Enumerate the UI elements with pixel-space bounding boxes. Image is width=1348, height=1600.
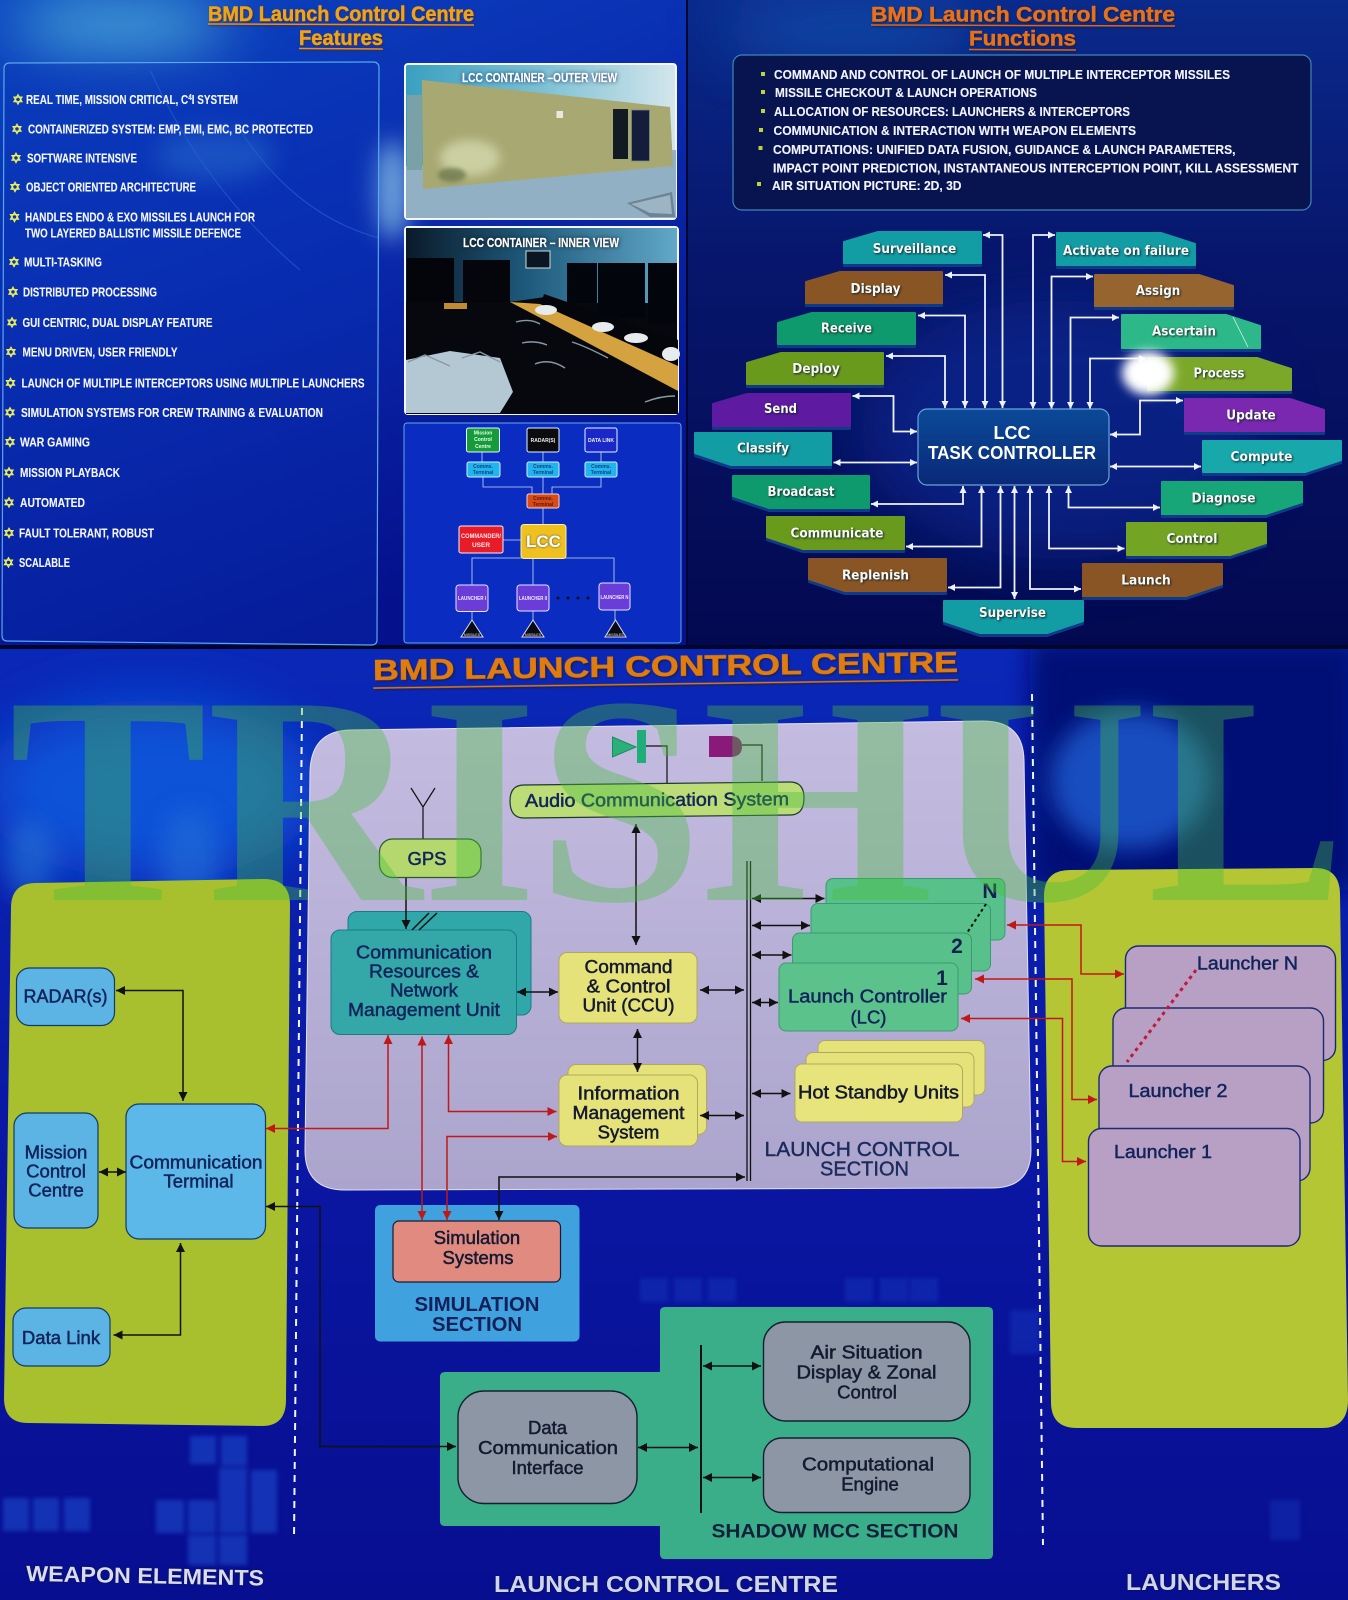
features list box: REAL TIME, MISSION CRITICAL, C (26, 93, 231, 107)
data communication interface (458, 1391, 637, 1504)
tag: classify (695, 433, 831, 465)
launcher stack: Launcher N (1197, 952, 1298, 974)
features list box: WAR GAMING (20, 436, 90, 450)
panel: control centre diagram (4, 636, 1348, 1597)
functions list box: COMMUNICATION & INTERACTION WITH WEAPON ELEMENTS (774, 124, 1136, 138)
launcher stack: Launcher 2 (1128, 1080, 1228, 1101)
box: data link: DATA LINK (588, 438, 614, 444)
tag: receive (778, 313, 915, 344)
shadow MCC section: SHADOW MCC SECTION (712, 1522, 958, 1542)
tag: process: Process (1194, 366, 1245, 382)
launch controller stack: Launch Controller (788, 986, 947, 1006)
launcher boxes: LAUNCHER N (600, 595, 629, 601)
features list box: ✡ (3, 526, 15, 542)
audio communication system (510, 782, 804, 818)
features list box: ✡ (5, 345, 17, 361)
launcher boxes: LAUNCHER I (458, 596, 487, 602)
features list box: ✡ (7, 285, 19, 301)
comms terminals: Comms. (533, 464, 553, 470)
label: launch control section (764, 1139, 960, 1180)
communication resources unit: Network (390, 980, 459, 1000)
features list box: GUI CENTRIC, DUAL DISPLAY FEATURE (22, 316, 212, 330)
missile triangles (461, 620, 626, 637)
command and control unit: Command (584, 956, 672, 977)
data communication interface: Data (528, 1417, 568, 1438)
communication resources unit: Communication (356, 942, 492, 962)
computational engine: Engine (841, 1474, 899, 1494)
features list box: OBJECT ORIENTED ARCHITECTURE (26, 180, 196, 194)
launcher boxes: LAUNCHER II (519, 596, 548, 602)
background: functions board (0, 0, 1348, 649)
tag: ascertain (1122, 315, 1260, 348)
launch controller stack: 1 (936, 967, 948, 990)
communication resources unit: Management Unit (348, 999, 500, 1020)
simulation section: SIMULATION (414, 1294, 540, 1316)
features heading: Features (299, 27, 383, 50)
features list box: ✡ (8, 255, 20, 271)
features list box: 4 (188, 93, 192, 102)
main heading: BMD LAUNCH CONTROL CENTRE (373, 647, 958, 687)
tag: receive: Receive (821, 322, 872, 336)
tag: compute (1203, 441, 1341, 472)
features heading (208, 3, 474, 50)
tag: send: Send (764, 402, 797, 417)
icon: microphone (709, 736, 762, 781)
launch controller stack: 2 (951, 935, 963, 958)
tag: replenish (809, 559, 946, 591)
launcher stack (1088, 946, 1336, 1246)
simulation systems box (393, 1221, 560, 1282)
box: mission control centre (466, 428, 500, 452)
mission control centre box: Control (26, 1160, 86, 1182)
functions list box: IMPACT POINT PREDICTION, INSTANTANEOUS INTERCEPTION POINT, KILL ASSESSMENT (773, 162, 1299, 176)
tag: diagnose: Diagnose (1192, 492, 1256, 506)
simulation section (375, 1205, 580, 1342)
functions list box: COMMAND AND CONTROL OF LAUNCH OF MULTIPLE INTERCEPTOR MISSILES (774, 68, 1230, 82)
simulation systems box: Systems (443, 1247, 513, 1268)
missile triangles: MISSILES (525, 633, 542, 637)
data communication interface: Interface (512, 1457, 584, 1478)
tag: assign (1095, 275, 1233, 306)
tag: update: Update (1226, 408, 1276, 424)
communication terminal box (126, 1104, 266, 1239)
radar box (16, 968, 114, 1026)
command and control unit: Unit (CCU) (582, 994, 674, 1016)
tag: supervise (944, 601, 1083, 633)
panel: weapon elements (4, 879, 290, 1426)
box: commander user: COMMANDER/ (461, 533, 501, 540)
functions heading (871, 4, 1175, 50)
tag: activate on failure (1057, 233, 1195, 265)
tag: assign: Assign (1136, 284, 1180, 299)
mission control centre box (14, 1113, 98, 1228)
features heading: BMD Launch Control Centre (208, 3, 474, 26)
photo: container inner view (405, 227, 680, 414)
radar box: RADAR(s) (24, 986, 108, 1006)
caption: outer view: LCC CONTAINER –OUTER VIEW (462, 70, 618, 85)
tag: update (1185, 399, 1324, 431)
tag: broadcast: Broadcast (768, 485, 834, 500)
box: radar (527, 428, 559, 452)
features list box: HANDLES ENDO & EXO MISSILES LAUNCH FOR (25, 210, 255, 224)
launch controller stack (779, 878, 1005, 1031)
computational engine (764, 1438, 970, 1512)
GPS: GPS (407, 848, 447, 869)
box: LCC: LCC (526, 532, 561, 551)
LCC task controller: TASK CONTROLLER (928, 443, 1096, 463)
functions list box: COMPUTATIONS: UNIFIED DATA FUSION, GUIDANCE & LAUNCH PARAMETERS, (773, 143, 1236, 157)
section labels: WEAPON ELEMENTS (26, 1561, 264, 1591)
tag: supervise: Supervise (979, 606, 1046, 621)
hot standby units (795, 1040, 985, 1122)
box: LCC (521, 524, 566, 558)
tag: control: Control (1166, 532, 1218, 547)
air situation display: Air Situation (810, 1342, 922, 1362)
features list box: LAUNCH OF MULTIPLE INTERCEPTORS USING MULTIPLE LAUNCHERS (22, 376, 364, 390)
tag: send (713, 394, 850, 426)
box: commander user: USER (472, 542, 490, 549)
mission control centre box: Mission (25, 1142, 87, 1162)
tag: launch (1083, 564, 1222, 596)
simulation systems box: Simulation (434, 1227, 520, 1248)
features list box: AUTOMATED (20, 496, 85, 510)
tag: surveillance (844, 232, 981, 263)
label: launch control section: SECTION (820, 1158, 909, 1180)
tag: activate on failure: Activate on failure (1063, 244, 1189, 259)
features list box: MULTI-TASKING (24, 256, 102, 270)
features list box: TWO LAYERED BALLISTIC MISSILE DEFENCE (25, 226, 241, 240)
hot standby units: Hot Standby Units (798, 1082, 959, 1102)
tag: control (1127, 523, 1266, 555)
comms terminals: Terminal (473, 470, 494, 476)
background: features board (0, 0, 687, 648)
command and control unit (559, 952, 697, 1023)
tag: launch: Launch (1121, 574, 1171, 588)
comms terminals: Comms. (473, 464, 493, 470)
tag: communicate: Communicate (790, 526, 884, 542)
connector arrows to task controller (834, 235, 1201, 599)
LCC task controller: LCC (994, 423, 1030, 443)
data communication interface: Communication (478, 1437, 618, 1458)
functions heading: Functions (969, 28, 1076, 50)
tag: ascertain: Ascertain (1152, 324, 1216, 340)
information management system: Management (572, 1102, 684, 1123)
tag: surveillance: Surveillance (873, 242, 956, 257)
black connectors (99, 824, 824, 1478)
air situation display (764, 1322, 970, 1421)
features list box: ✡ (5, 376, 16, 392)
comms terminals: Terminal (533, 470, 554, 476)
features list box: ✡ (6, 316, 18, 332)
features list box: ✡ (4, 406, 16, 422)
LCC task controller (918, 409, 1109, 485)
communication terminal box: Terminal (164, 1170, 233, 1192)
box: central comms terminal: Terminal (533, 502, 554, 508)
section dividers (294, 694, 1043, 1545)
information management system: System (598, 1122, 659, 1142)
tag: display: Display (850, 282, 901, 297)
computational engine: Computational (802, 1454, 934, 1474)
features list box: I SYSTEM (192, 93, 238, 107)
information management system: Information (578, 1082, 680, 1104)
box: mission control centre: Centre (475, 444, 491, 450)
tag: classify: Classify (737, 442, 789, 456)
features list box: ✡ (10, 151, 22, 167)
features list box (2, 62, 379, 645)
communication resources unit: Resources & (369, 960, 480, 982)
section labels (26, 1561, 1281, 1597)
audio communication system: Audio Communication System (525, 788, 789, 811)
missile triangles: MISSILES (464, 633, 481, 637)
missile triangles: MISSILES (607, 633, 624, 637)
icon: antenna (411, 788, 435, 839)
features list box: DISTRIBUTED PROCESSING (23, 286, 157, 300)
box: central comms terminal: Comms. (533, 496, 553, 502)
simulation section: SECTION (432, 1314, 522, 1336)
command and control unit: & Control (586, 976, 670, 996)
features list box: ✡ (3, 466, 15, 482)
features list box: ✡ (12, 92, 24, 108)
tag: deploy: Deploy (792, 362, 840, 377)
comms terminals: Comms. (591, 464, 611, 470)
section labels: LAUNCH CONTROL CENTRE (494, 1571, 838, 1597)
functions list box (733, 55, 1311, 210)
watermark: TRISHUL: TRISHUL (9, 636, 1346, 965)
box: central comms terminal (527, 494, 559, 508)
box: commander user (459, 526, 503, 553)
caption: inner view: LCC CONTAINER – INNER VIEW (463, 235, 620, 250)
launcher stack: Launcher 1 (1114, 1141, 1212, 1162)
features list box: ✡ (9, 210, 20, 226)
system bus (747, 861, 750, 1181)
features list box: ✡ (3, 556, 14, 572)
launcher boxes (456, 583, 630, 612)
tag: process (1148, 358, 1291, 390)
functions heading: BMD Launch Control Centre (871, 4, 1175, 26)
communication terminal box: Communication (130, 1152, 262, 1172)
functions list box: MISSILE CHECKOUT & LAUNCH OPERATIONS (775, 86, 1037, 100)
launch controller stack: (LC) (851, 1006, 886, 1028)
communication resources unit (331, 912, 531, 1034)
red connectors (266, 925, 1124, 1220)
shadow MCC section (440, 1307, 993, 1559)
box: mission control centre: Mission (474, 430, 492, 436)
features list box: ✡ (3, 496, 15, 512)
tag: compute: Compute (1230, 450, 1293, 465)
tag: broadcast (733, 476, 869, 508)
tag: diagnose (1162, 482, 1302, 514)
glare (1122, 351, 1174, 395)
features list box: ✡ (11, 122, 23, 138)
section labels: LAUNCHERS (1126, 1569, 1281, 1595)
panel: launchers (1044, 868, 1348, 1428)
box: radar: RADAR(S) (531, 438, 556, 444)
box: mission control centre: Control (474, 437, 492, 443)
icon: speaker (612, 730, 667, 783)
mini system diagram (404, 423, 681, 643)
features list box: SCALABLE (19, 556, 70, 570)
features list box: MISSION PLAYBACK (20, 466, 120, 480)
comms terminals (467, 462, 617, 477)
launch controller stack: N (982, 880, 998, 903)
mission control centre box: Centre (28, 1180, 84, 1200)
features list box: SIMULATION SYSTEMS FOR CREW TRAINING & EVALUATION (21, 406, 323, 420)
label: launch control section: LAUNCH CONTROL (764, 1139, 960, 1161)
features list box: FAULT TOLERANT, ROBUST (19, 526, 154, 540)
features list box: ✡ (9, 180, 21, 196)
function tags (695, 232, 1341, 633)
tag: replenish: Replenish (842, 568, 909, 584)
data link box: Data Link (22, 1327, 101, 1348)
functions list box: AIR SITUATION PICTURE: 2D, 3D (772, 179, 962, 193)
air situation display: Display & Zonal (796, 1362, 936, 1382)
features list box: MENU DRIVEN, USER FRIENDLY (22, 346, 178, 360)
panel: launch control section (305, 721, 1031, 1190)
information management system (559, 1064, 706, 1146)
GPS (380, 839, 481, 878)
features list box: CONTAINERIZED SYSTEM: EMP, EMI, EMC, BC PROTECTED (28, 122, 313, 136)
background: control centre board (0, 640, 1348, 1600)
tag: display (806, 272, 942, 303)
air situation display: Control (837, 1382, 897, 1402)
functions list box: ALLOCATION OF RESOURCES: LAUNCHERS & INTERCEPTORS (774, 105, 1130, 119)
comms terminals: Terminal (591, 470, 612, 476)
box: data link (585, 428, 617, 452)
panel: functions (695, 4, 1341, 633)
features list box: SOFTWARE INTENSIVE (27, 152, 137, 166)
photo: container outer view (405, 64, 676, 219)
features list box: ✡ (4, 435, 16, 451)
tag: deploy (747, 353, 883, 384)
tag: communicate (767, 517, 904, 549)
data link box (13, 1308, 110, 1366)
panel: features (2, 3, 681, 645)
